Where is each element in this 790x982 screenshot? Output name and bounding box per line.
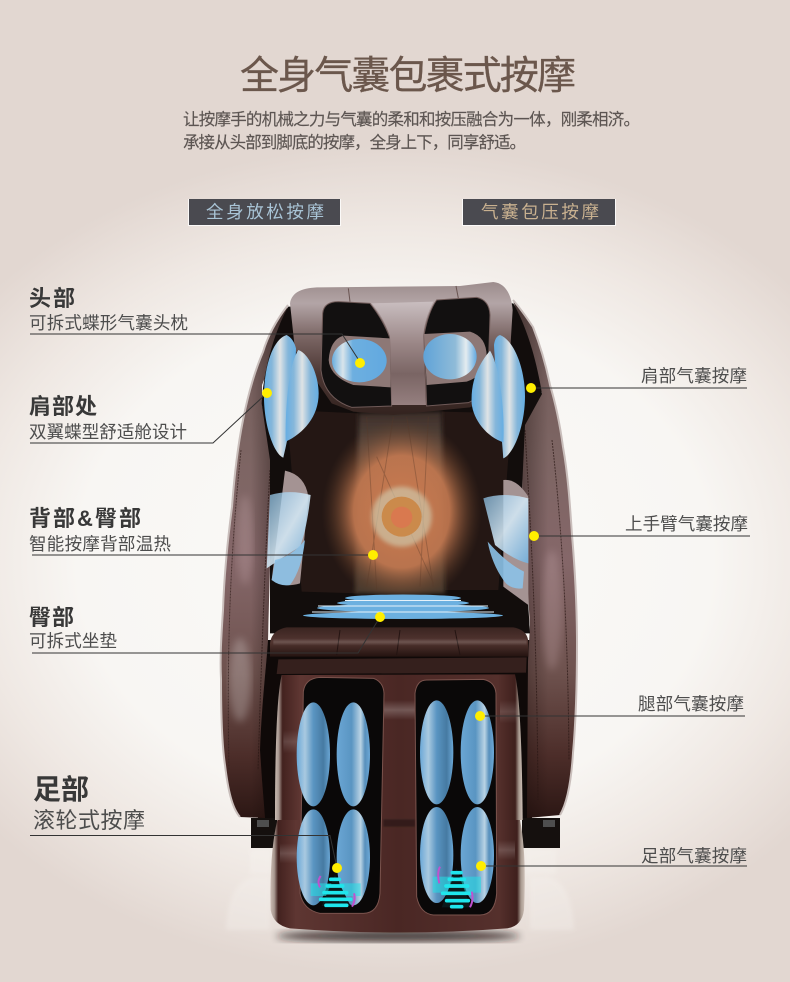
- callout: shoulder airbag: [526, 366, 747, 393]
- center head strap: [372, 302, 433, 405]
- left pillow airbag: [329, 336, 391, 387]
- intro text: 承接从头部到脚底的按摩，全身上下，同享舒适。: [183, 133, 526, 152]
- left arm cushion airbags: [267, 471, 311, 585]
- massage chair: [221, 282, 577, 942]
- callout: feet: 足部: [33, 774, 89, 805]
- callout: feet: [30, 774, 342, 873]
- callout: hips: 臀部: [29, 605, 74, 630]
- left leg well: [297, 677, 384, 913]
- callout: back and hips: 智能按摩背部温热: [29, 534, 171, 554]
- callout: feet: 滚轮式按摩: [33, 808, 145, 833]
- right well airbags: [420, 700, 494, 903]
- seat cushion: [270, 627, 528, 674]
- left side shell: [221, 305, 288, 818]
- left shoulder airbags: [264, 335, 319, 458]
- callout: shoulder wings: 肩部处: [29, 394, 97, 419]
- callout: hips: [29, 605, 385, 653]
- callout: shoulder wings: 双翼蝶型舒适舱设计: [29, 422, 187, 442]
- title: 全身气囊包裹式按摩: [240, 55, 576, 98]
- chair floor shadow: [276, 930, 520, 942]
- right foot roller: [433, 868, 481, 907]
- tab: full body relax massage: 全身放松按摩: [206, 202, 324, 222]
- right foot purple waves: [438, 867, 473, 907]
- dark cabin: [262, 303, 542, 633]
- chair floor reflections: [226, 850, 574, 930]
- seat airbag: [303, 594, 503, 619]
- central back panel: [355, 412, 445, 593]
- upper leg rest: [275, 674, 523, 820]
- right shoulder airbags: [472, 335, 525, 458]
- left foot roller: [311, 875, 361, 906]
- back heat glow: [322, 417, 482, 605]
- callout: hips: 可拆式坐垫: [29, 631, 118, 651]
- lower dark underlay: [258, 640, 532, 818]
- upper chair, back and airbags: [262, 282, 542, 633]
- callout: leg airbag: 腿部气囊按摩: [638, 694, 744, 714]
- foot rest: [270, 820, 525, 932]
- tab: airbag compression massage: [462, 199, 616, 226]
- tab: full body relax massage: [188, 199, 341, 226]
- leg rest highlights: [280, 700, 517, 863]
- callout: foot airbag: 足部气囊按摩: [641, 846, 747, 866]
- callout: head: 可拆式蝶形气囊头枕: [29, 313, 188, 333]
- callout: head: [29, 286, 365, 368]
- tab: airbag compression massage: 气囊包压按摩: [481, 202, 599, 222]
- callout: shoulder airbag: 肩部气囊按摩: [641, 366, 747, 386]
- back side bolsters: [287, 410, 512, 593]
- callout: leg airbag: [475, 694, 745, 721]
- right leg well: [415, 679, 497, 915]
- left well airbags: [297, 702, 370, 905]
- callout: upper arm airbag: 上手臂气囊按摩: [625, 514, 748, 534]
- callout: head: 头部: [29, 286, 75, 311]
- callout: foot airbag: [476, 846, 747, 871]
- right arm cushion airbags: [483, 480, 528, 605]
- seat cushion and leg rest: [270, 627, 528, 932]
- base feet: [251, 818, 560, 848]
- right black head panel: [424, 297, 490, 406]
- intro text: [183, 110, 640, 152]
- left foot purple waves: [318, 876, 355, 907]
- callout: back and hips: 背部&臀部: [29, 506, 141, 531]
- left black head panel: [321, 302, 392, 407]
- right pillow airbag: [423, 332, 487, 385]
- leg rest crease: [383, 819, 415, 827]
- right side shell: [513, 300, 577, 818]
- callout: back and hips: [29, 506, 378, 560]
- callout: shoulder wings: [29, 388, 272, 443]
- callout: upper arm airbag: [529, 514, 750, 541]
- headrest: [290, 282, 513, 415]
- intro text: 让按摩手的机械之力与气囊的柔和和按压融合为一体，刚柔相济。: [183, 110, 640, 129]
